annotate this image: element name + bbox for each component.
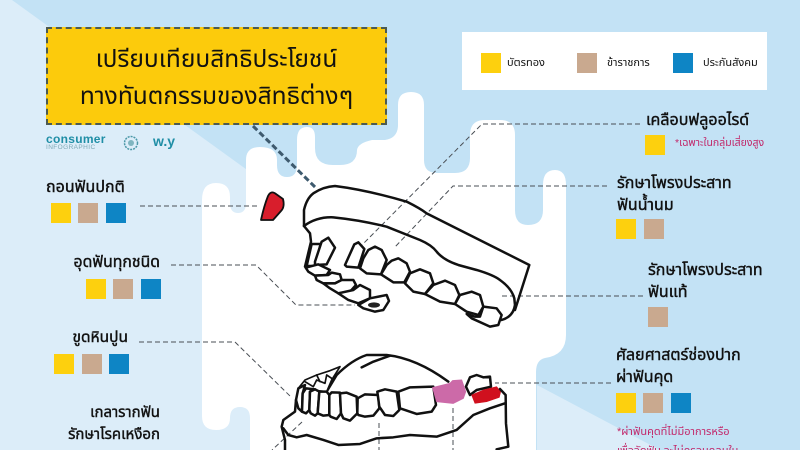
legend [462,32,767,90]
label: oral surgery [616,346,741,450]
label: primary root canal [616,174,732,239]
logos: INFOGRAPHIC [46,144,96,151]
white blob [202,92,566,450]
label: scaling: ขูดหินปูน [72,329,128,346]
label: primary root canal: ฟันน้ำนม [617,197,674,214]
label: oral surgery: ผ่าฟันคุด [616,369,673,386]
label: permanent root canal [648,261,763,327]
title box: ทางทันตกรรมของสิทธิต่างๆ [80,83,353,110]
label: permanent root canal: รักษาโพรงประสาท [648,262,763,279]
label: filling [74,254,161,299]
label: root planing: รักษาโรคเหงือก [68,426,160,443]
label: fluoride [645,111,764,155]
logos [46,132,175,151]
label: primary root canal: รักษาโพรงประสาท [617,175,732,192]
label: permanent root canal: ฟันแท้ [648,284,688,301]
label: oral surgery: *ผ่าฟันคุดที่ไม่มีอาการหรือ [617,426,730,438]
label: fluoride: *เฉพาะในกลุ่มเสี่ยงสูง [675,137,764,149]
logos: consumer [46,132,106,146]
logos: w.y [153,133,175,149]
label: filling: อุดฟันทุกชนิด [74,254,160,271]
legend: ข้าราชการ [607,57,650,69]
label: root planing: เกลารากฟัน [90,404,160,421]
label: extraction [46,179,126,223]
label: root planing [68,404,160,443]
label: fluoride: เคลือบฟลูออไรด์ [646,112,749,129]
label: extraction: ถอนฟันปกติ [46,179,125,196]
legend: บัตรทอง [507,57,545,69]
title box: เปรียบเทียบสิทธิประโยชน์ [96,46,337,73]
legend: ประกันสังคม [703,57,758,69]
label: scaling [54,329,129,374]
label: oral surgery: ศัลยศาสตร์ช่องปาก [616,347,741,364]
title box [46,27,387,125]
